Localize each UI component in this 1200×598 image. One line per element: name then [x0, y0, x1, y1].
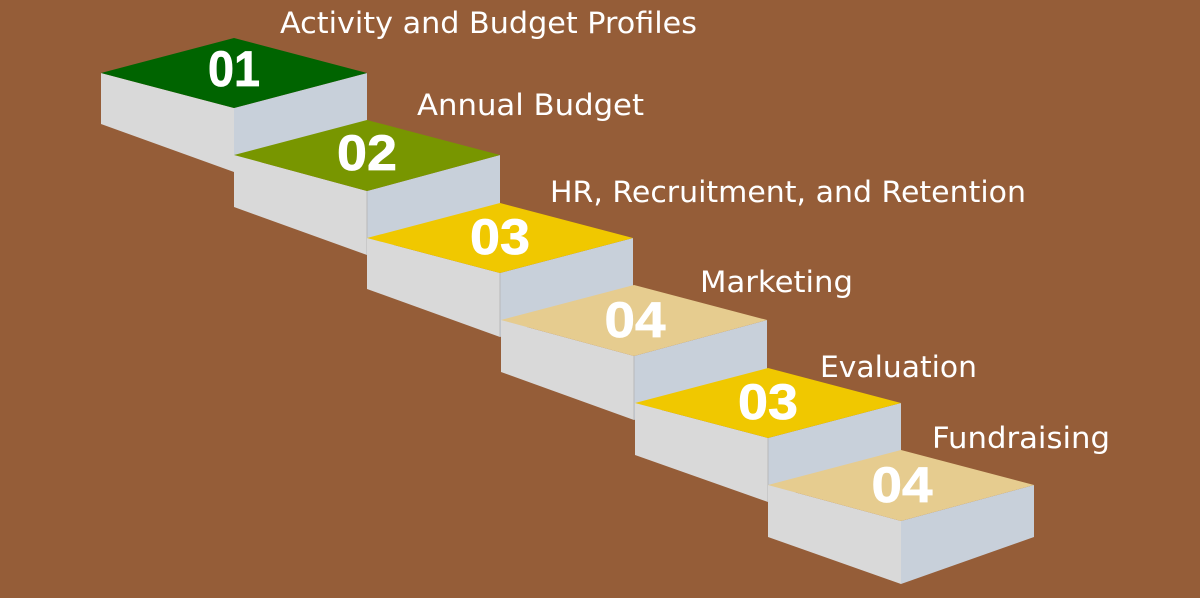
step 4 number: 04	[604, 292, 666, 348]
step 3 label: HR, Recruitment, and Retention	[550, 175, 1026, 209]
step 3 number: 03	[470, 209, 530, 265]
step 2 number: 02	[337, 125, 397, 181]
step 1: Activity and Budget Profiles	[101, 6, 697, 172]
step 2 label: Annual Budget	[417, 88, 644, 122]
step 3 top face	[367, 203, 633, 273]
step 5 number: 03	[738, 374, 798, 430]
step 6 number: 04	[872, 457, 933, 513]
step 3: HR, Recruitment, and Retention	[367, 175, 1026, 337]
step 6 top face	[768, 450, 1034, 521]
step 1 label: Activity and Budget Profiles	[280, 6, 697, 40]
step 2: Annual Budget	[234, 88, 644, 255]
step 5 label: Evaluation	[820, 350, 977, 384]
step 4 top face	[501, 285, 767, 356]
step 6 label: Fundraising	[932, 421, 1110, 455]
step 5: Evaluation	[635, 350, 977, 502]
step 5 top face	[635, 368, 901, 438]
step 6: Fundraising	[768, 421, 1110, 584]
step 2 top face	[234, 120, 500, 191]
step 4 label: Marketing	[700, 265, 853, 299]
step 1 number: 01	[208, 41, 260, 97]
step 4: Marketing	[501, 265, 853, 420]
step 1 top face	[101, 38, 367, 108]
